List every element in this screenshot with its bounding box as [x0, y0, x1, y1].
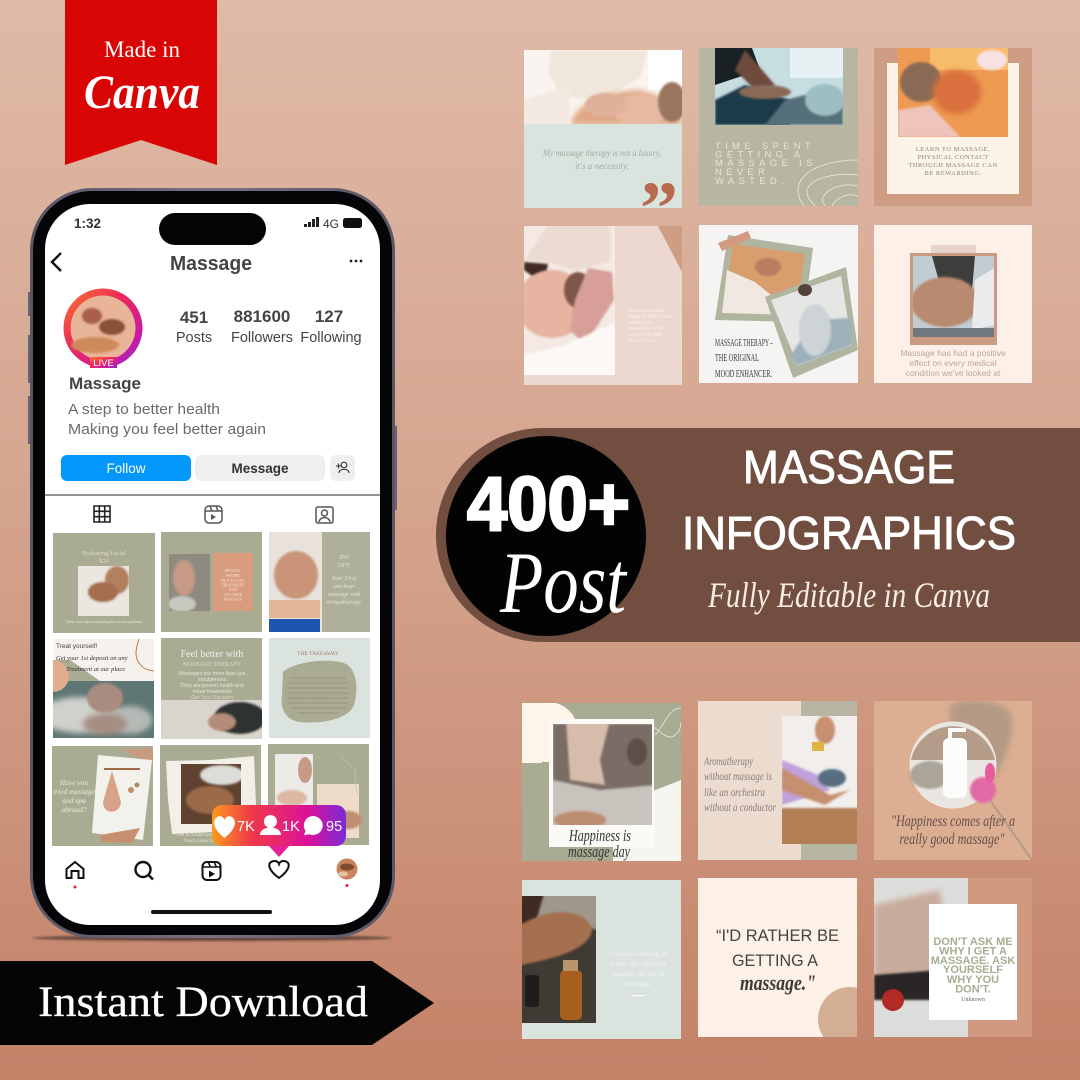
template: rather be getting: “I'D RATHER BE [716, 926, 839, 945]
follow and message buttons: Message [231, 461, 289, 476]
template: mood enhancer: MOOD ENHANCER. [715, 369, 772, 380]
template: happiness polaroid: massage day [568, 842, 630, 861]
grid post: torn paper photo: Touch pages has [184, 839, 217, 844]
central title band [436, 428, 1080, 642]
ribbon: Made in Canva [65, 0, 217, 165]
icon: comment bubble [304, 816, 323, 835]
profile header [52, 253, 362, 275]
template: happiness polaroid: Happiness is [568, 826, 631, 845]
status bar: 1:32 [74, 216, 101, 231]
status bar: 4G [323, 217, 339, 231]
grid post: feel better: Get Your Discount [191, 695, 233, 701]
nav icon: search [136, 862, 153, 880]
grid post: special promo [161, 532, 262, 632]
badge: 400+ Post: Post [499, 535, 628, 632]
grid post: special promo: TREATMENT [221, 582, 245, 588]
template: mood enhancer: MASSAGE THERAPY – [715, 338, 773, 349]
grid post: special promo: PROMO [226, 573, 240, 578]
grid post: treat yourself: Treat yourself! [56, 643, 97, 650]
title text: INFOGRAPHICS [682, 507, 1016, 559]
template grid: bottom [515, 700, 1032, 1051]
template: bottle photo: Curious walking in [609, 949, 667, 958]
icon: person [260, 815, 281, 835]
template: aromatherapy: Aromatherapy [703, 756, 754, 768]
phone side buttons [28, 292, 397, 510]
icon: heart [214, 816, 235, 838]
title text [682, 441, 1016, 559]
grid post: have you tried massage [52, 746, 153, 846]
instant download banner [0, 961, 434, 1045]
badge: 400+ Post [446, 436, 646, 636]
template: time spent: MASSAGE IS [715, 158, 817, 169]
grid post: treat yourself [53, 639, 154, 738]
template: time spent [699, 48, 858, 206]
profile bio: A step to better health [68, 401, 220, 418]
template: don't ask me: WHY I GET A [939, 946, 1007, 958]
notification bubble: 7K [237, 819, 255, 835]
grid post: two photos [268, 744, 369, 845]
grid post: first massage offer [269, 532, 370, 632]
template: don't ask me: YOURSELF [943, 964, 1003, 976]
phone screen [45, 204, 380, 925]
grid post: first massage offer: massage with [328, 592, 360, 598]
template: head massage: massage and [628, 326, 661, 332]
profile tab icons [94, 506, 333, 523]
nav icon: heart [269, 861, 289, 878]
home indicator [151, 910, 272, 914]
template: learn to massage [874, 48, 1032, 206]
template: don't ask me: Unknown [961, 997, 985, 1003]
template: time spent: WASTED. [715, 176, 788, 187]
template: bottle photo: mastery the art of [612, 969, 665, 978]
grid post: first massage offer: $50 [340, 554, 348, 561]
grid post: feel better: Massages are more than just [179, 671, 246, 677]
template: positive effect [874, 225, 1032, 383]
ribbon: Made in Canva: Made in [104, 37, 180, 62]
template: time spent: NEVER [715, 167, 769, 178]
template: rather be getting [698, 878, 857, 1037]
profile bio [68, 374, 266, 438]
template: don't ask me: MASSAGE. ASK [931, 955, 1015, 967]
grid post: special promo: MASSAGE [223, 596, 243, 602]
template: don't ask me: WHY YOU [947, 974, 999, 986]
template: learn to massage: PHYSICAL CONTACT [917, 154, 989, 161]
grid post: hydrating facial: $20 [99, 558, 109, 565]
grid post: feel better: MASSAGE THERAPY [183, 662, 242, 668]
template: rather be getting: GETTING A [732, 951, 819, 970]
bottom navigation [66, 858, 358, 888]
template: aromatherapy: without massage is [704, 771, 772, 783]
grid post: treat yourself: Get your 1st deposit on any [56, 655, 128, 662]
template: positive effect: condition we've looked at [906, 368, 1001, 378]
template: necessity quote: My massage therapy is not a luxury, [542, 148, 661, 158]
profile stats [176, 307, 362, 346]
badge: 400+ Post: 400+ [467, 462, 630, 547]
template: don't ask me: DON'T. [955, 984, 991, 996]
template: rather be getting: massage." [740, 970, 816, 995]
template: aromatherapy: like an orchestra [704, 787, 765, 799]
grid post: the takeaway [269, 638, 370, 738]
subtitle text: Fully Editable in Canva [707, 575, 990, 615]
template: happiness polaroid [522, 703, 681, 861]
profile stats: 127 [315, 307, 343, 326]
template: time spent: TIME SPENT [715, 141, 815, 152]
grid post: have you tried massage: abroad? [61, 805, 87, 814]
profile header: Massage [170, 253, 252, 275]
profile stats: Posts [176, 330, 212, 346]
template: necessity quote: it's a necessity. [575, 161, 629, 171]
template: learn to massage: THROUGH MASSAGE CAN [908, 162, 998, 169]
grid post: hydrating facial [53, 533, 155, 633]
grid post: special promo: AND [229, 587, 237, 592]
profile stats: Followers [231, 330, 293, 346]
grid post: torn paper photo: Use is curated portfolio [176, 833, 224, 838]
template: don't ask me [874, 878, 1032, 1037]
template: happiness comes [874, 701, 1032, 860]
template: head massage: natural health [628, 332, 661, 338]
template: don't ask me: DON'T ASK ME [933, 936, 1013, 948]
grid post: have you tried massage: tried massage [53, 787, 96, 796]
grid post: feel better: They are proven health and [180, 683, 244, 689]
profile stats: Following [300, 330, 362, 346]
template: positive effect: Massage has had a positive [900, 348, 1006, 358]
grid post: hydrating facial: Relax and enjoy a hydrating 60-minute spa facial [66, 620, 142, 624]
template: necessity quote: ” [640, 167, 678, 251]
template: aromatherapy [698, 701, 857, 860]
template: head massage: Here are some [628, 308, 664, 314]
phone body [30, 188, 395, 938]
grid post: torn paper photo [160, 745, 261, 846]
grid post: treat yourself: Treatment at our place [66, 666, 125, 673]
profile stats: 881600 [234, 307, 290, 326]
template: mood enhancer [699, 225, 858, 383]
grid post: first massage offer: Your First [332, 576, 356, 582]
grid post: the takeaway: THE TAKEAWAY [297, 651, 339, 657]
notification bubble: 1K [282, 819, 300, 835]
grid post: first massage offer: OFF [338, 563, 350, 569]
grid post: special promo: SPECIAL [225, 568, 242, 573]
grid post: special promo: GET FREE [224, 592, 243, 597]
nav icon: profile avatar [336, 858, 358, 880]
profile post grid [37, 532, 370, 846]
phone mockup [28, 188, 397, 941]
nav icon: home [66, 862, 84, 878]
title text: MASSAGE [743, 441, 955, 493]
profile bio: Massage [69, 374, 141, 393]
status bar [74, 213, 362, 245]
grid post: feel better: Feel better with [181, 649, 243, 660]
template: learn to massage: LEARN TO MASSAGE. [916, 146, 990, 153]
grid post: have you tried massage: Have you [59, 778, 89, 787]
follow and message buttons: Follow [106, 461, 146, 476]
grid post: first massage offer: #ritualtherapy [327, 600, 362, 606]
grid post: feel better: mood treatments [193, 689, 232, 695]
profile stats: 451 [180, 308, 208, 327]
template: learn to massage: BE REWARDING. [924, 170, 982, 177]
template: necessity quote [524, 50, 682, 251]
template: time spent: GETTING A [715, 150, 804, 160]
template: bottle photo: warm oil—the true [609, 959, 667, 968]
grid post: feel better: indulgences [198, 677, 226, 683]
grid post: hydrating facial: Hydrating Facial [82, 550, 126, 557]
phone shadow [32, 935, 392, 941]
notification bubble [212, 805, 346, 857]
nav icon: reels [202, 862, 220, 880]
template: head massage [524, 226, 682, 385]
grid post: have you tried massage: and spa [62, 796, 86, 805]
ribbon: Made in Canva: Canva [84, 66, 200, 119]
template: mood enhancer: THE ORIGINAL [715, 353, 759, 364]
template: head massage: ways to feel great [627, 314, 672, 320]
template grid: top [515, 48, 1032, 385]
template: bottle photo: massage [625, 979, 651, 988]
template: head massage: a book on [628, 320, 652, 326]
notification bubble: 95 [326, 819, 342, 835]
grid post: feel better [161, 638, 262, 739]
grid post: first massage offer: one-hour [333, 584, 356, 590]
instant download banner: Instant Download [38, 979, 368, 1026]
follow and message buttons [61, 455, 355, 481]
template: positive effect: effect on every medical [909, 358, 997, 368]
template: aromatherapy: without a conductor [704, 802, 776, 814]
profile bio: Making you feel better again [68, 421, 266, 438]
grid post: special promo: BUY FACIAL [221, 578, 245, 583]
template: bottle photo [522, 880, 681, 1039]
template: head massage: care of you. [628, 338, 657, 344]
profile avatar with live ring: LIVE [93, 358, 114, 369]
profile avatar with live ring [64, 288, 142, 369]
